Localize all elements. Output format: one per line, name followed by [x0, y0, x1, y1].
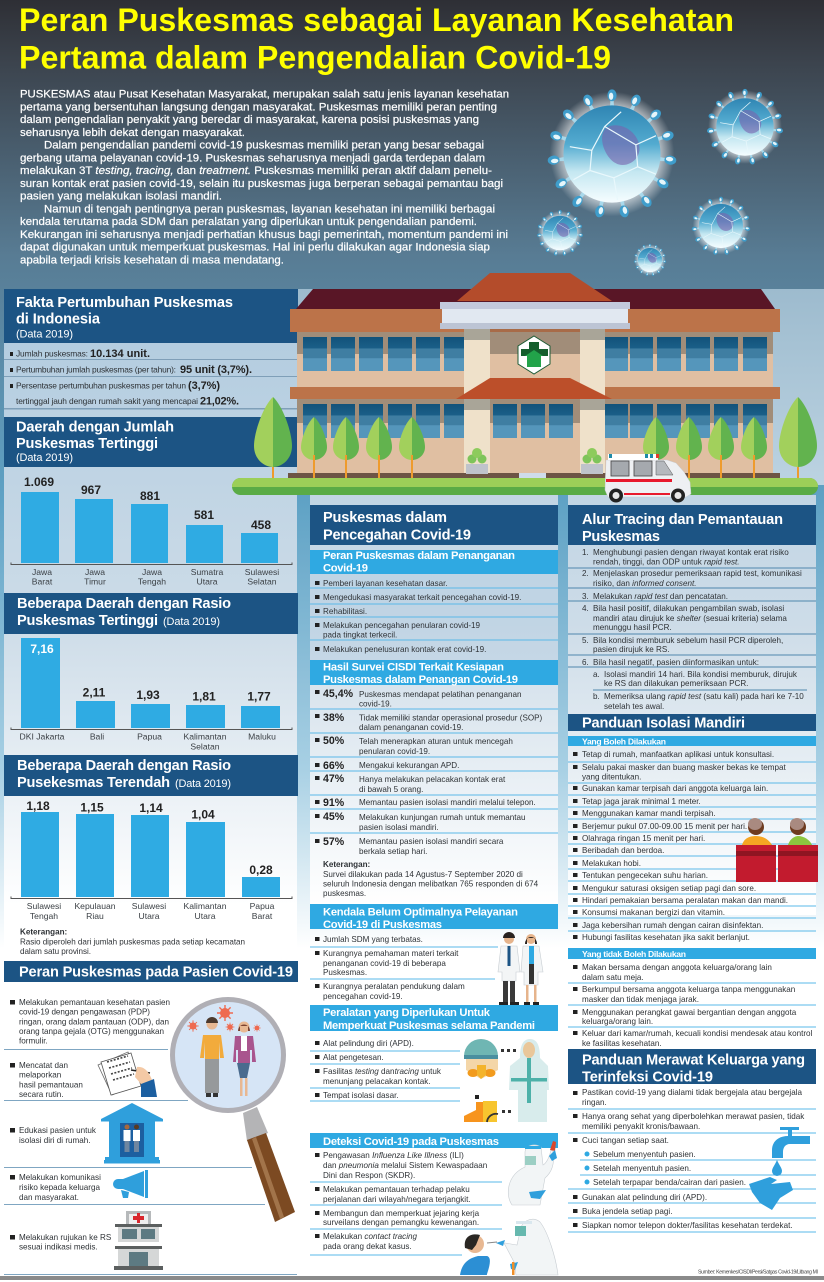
list: deteksi: pada orang dekat kasus.	[323, 1242, 412, 1251]
bar chart: jumlah puskesmas: Tengah	[138, 576, 166, 586]
subheading: yang boleh	[568, 736, 816, 746]
bar chart: jumlah puskesmas: 967	[81, 483, 101, 497]
list: merawat keluarga: Hanya orang sehat yang diperbolehkan merawat pasien, tidak	[582, 1112, 805, 1121]
heading: daerah jumlah tertinggi: Puskesmas Tertinggi	[16, 436, 158, 452]
left column panel	[4, 343, 297, 953]
bar chart: jumlah puskesmas	[11, 475, 292, 586]
list: deteksi	[310, 1151, 502, 1255]
list: alur tracing steps: pasien dirujuk ke RS.	[593, 645, 669, 654]
bar chart: rasio tertinggi: 2,11	[83, 686, 106, 700]
bar chart: jumlah puskesmas: Jawa	[32, 567, 52, 577]
bar chart: rasio tertinggi	[11, 638, 292, 752]
list: peran pada pasien: isolasi diri di rumah.	[19, 1136, 91, 1145]
list: merawat keluarga: Gunakan alat pelindung diri (APD).	[582, 1193, 707, 1202]
list: hasil survei stats: 57%	[323, 836, 345, 848]
sky panel behind building	[298, 289, 824, 485]
list: yang boleh: Melakukan hobi.	[582, 859, 641, 868]
heading: daerah jumlah tertinggi: Daerah dengan Jumlah	[16, 420, 174, 436]
list: alur tracing steps: 5.	[582, 636, 589, 645]
list: kendala: Jumlah SDM yang terbatas.	[323, 935, 423, 944]
list: peran pada pasien: Melakukan rujukan ke RS	[19, 1233, 112, 1242]
list: hasil survei stats: Tidak memiliki standar operasional prosedur (SOP)	[359, 714, 543, 722]
list: merawat keluarga: Pastikan covid-19 yang dialami tidak bergejala atau bergejala	[582, 1088, 803, 1097]
icon: puskesmas logo	[518, 336, 550, 374]
list: alur tracing steps: 3.	[582, 592, 589, 601]
bar chart: rasio tertinggi: Bali	[90, 732, 104, 742]
title: Peran Puskesmas sebagai Layanan Kesehatan	[19, 2, 734, 38]
bar chart: rasio tertinggi: Selatan	[190, 742, 220, 752]
note: keterangan survei: Survei dilakukan pada 14 Agustus-7 September 2020 di	[323, 870, 523, 879]
list: alur tracing steps: 2.	[582, 569, 589, 578]
source credit: Sumber: Kemenkes/CISDI/Persi/Satgas Covid-19/Litbang MI	[698, 1270, 818, 1276]
note: keterangan rasio: Rasio diperoleh dari jumlah puskesmas pada setiap kecamatan	[20, 938, 245, 946]
list: alur tracing steps: ke RS dan dilakukan pemeriksaan PCR.	[604, 679, 748, 688]
subheading: deteksi	[310, 1133, 558, 1148]
icon: health worker with swab	[508, 1141, 557, 1205]
intro text block: dalam pengendalian penyakit yang beredar di masyarakat, karena posisi puskesmas yang	[20, 114, 479, 126]
intro text block: suran kontak erat pasien covid-19, selain itu puskesmas juga berperan sebagai pemantau bagi	[20, 178, 503, 190]
bar chart: rasio terendah: Tengah	[30, 911, 58, 921]
list: peralatan: Tempat isolasi dasar.	[323, 1091, 399, 1100]
list: hasil survei stats: dalam penanganan covid-19.	[359, 723, 463, 732]
fact rows: 95 unit (3,7%).	[180, 364, 252, 376]
list: peran pada pasien: risiko kepada keluarga	[19, 1183, 100, 1192]
list: yang boleh: Tetap jaga jarak minimal 1 meter.	[582, 797, 701, 806]
bar chart: jumlah puskesmas: Utara	[196, 576, 218, 586]
list: peran pada pasien: secara rutin.	[19, 1090, 64, 1099]
icon: house isolation	[101, 1103, 163, 1164]
icon: form and hand	[98, 1052, 157, 1097]
list: yang boleh: Hindari pemakaian bersama peralatan makan dan mandi.	[582, 896, 788, 905]
bar chart: jumlah puskesmas: Barat	[32, 576, 53, 586]
list: merawat keluarga: Buka jendela setiap pagi.	[582, 1207, 672, 1216]
fact rows: Pertumbuhan jumlah puskesmas (per tahun):	[16, 364, 176, 374]
bar chart: rasio tertinggi: 1,77	[247, 690, 271, 704]
bar chart: rasio terendah: 1,04	[191, 808, 215, 822]
list: hasil survei stats: berkala setiap hari.	[359, 847, 427, 856]
list: peralatan: Alat pengetesan.	[323, 1053, 384, 1062]
bar chart: jumlah puskesmas: Sulawesi	[245, 567, 279, 577]
list: peran pada pasien: Melakukan komunikasi	[19, 1173, 101, 1182]
heading: rasio tertinggi	[4, 593, 298, 634]
list: peran pada pasien: melaporkan	[19, 1070, 61, 1080]
bar chart: rasio terendah: Sulawesi	[132, 901, 166, 911]
heading: rasio tertinggi: Beberapa Daerah dengan Rasio	[17, 596, 231, 612]
note: keterangan rasio	[20, 928, 245, 956]
intro text block: apabila terjadi krisis kesehatan di masa mendatang.	[20, 254, 284, 266]
icon: doctors	[498, 932, 543, 1005]
list: peralatan: Fasilitas testing dantracing untuk	[323, 1067, 442, 1076]
list: kendala: pencegahan covid-19.	[323, 992, 403, 1001]
fact rows: (3,7%)	[188, 380, 220, 392]
intro text block	[20, 88, 509, 266]
subheading: hasil survei	[310, 660, 558, 686]
bar chart: rasio terendah: Utara	[194, 911, 216, 921]
heading: rasio terendah: Beberapa Daerah dengan Rasio	[17, 758, 231, 774]
heading: rasio terendah: Pusekesmas Terendah	[17, 775, 170, 791]
list: hasil survei stats: Memantau pasien isolasi mandiri melalui telepon.	[359, 798, 536, 807]
heading: alur tracing	[568, 505, 816, 545]
list: hasil survei stats: covid-19.	[359, 700, 392, 708]
list: peran pada pasien: sesuai indikasi medis.	[19, 1242, 98, 1252]
list: deteksi: dan pneumonia melalui Sistem Kewaspadaan	[323, 1161, 487, 1170]
fact rows: 21,02%.	[200, 396, 239, 408]
list: hasil survei stats: pasien isolasi mandiri.	[359, 823, 439, 832]
list: kendala: Kurangnya peralatan pendukung dalam	[323, 982, 465, 991]
bar chart: rasio terendah: Utara	[138, 911, 160, 921]
subheading: kendala: Kendala Belum Optimalnya Pelayanan	[323, 906, 518, 918]
list: alur tracing steps: 1.	[582, 548, 589, 557]
bar chart: rasio terendah: Riau	[86, 911, 104, 921]
list: kendala	[310, 935, 498, 1001]
list: alur tracing steps: Isolasi mandiri 14 hari. Bila kondisi memburuk, dirujuk	[604, 670, 798, 679]
list: merawat keluarga: Cuci tangan setiap saat.	[582, 1136, 669, 1145]
list: deteksi: Melakukan pemantauan terhadap pelaku	[323, 1185, 470, 1194]
list: hasil survei stats: penularan covid-19.	[359, 747, 430, 756]
list: yang tidak boleh: Makan bersama dengan anggota keluarga/orang lain	[582, 963, 772, 972]
list: alur tracing steps: mandiri atau dirujuk ke shelter (sesuai kriteria) selama	[593, 614, 787, 623]
list: hasil survei stats: 66%	[323, 760, 345, 772]
list: hasil survei stats: Melakukan kunjungan rumah untuk memantau	[359, 813, 525, 822]
list: merawat keluarga: Siapkan nomor telepon dokter/fasilitas kesehatan terdekat.	[582, 1221, 793, 1230]
list: yang tidak boleh: keluarga/orang lain.	[582, 1017, 653, 1026]
list: hasil survei stats: 91%	[323, 797, 345, 809]
list: alur tracing steps: Bila hasil positif, dilakukan pengambilan swab, isolasi	[593, 604, 784, 613]
note: keterangan rasio: Keterangan:	[20, 928, 67, 936]
list: merawat keluarga: memiliki penyakit kronis/bawaan.	[582, 1122, 700, 1131]
bar chart: rasio tertinggi: Kalimantan	[184, 732, 227, 742]
bar chart: rasio tertinggi: DKI Jakarta	[20, 732, 65, 742]
list: hasil survei stats: 45%	[323, 811, 345, 823]
list: peran pada pasien: Edukasi pasien untuk	[19, 1126, 97, 1135]
list: yang tidak boleh: Keluar dari kamar/rumah, kecuali kondisi mendesak atau kontrol	[582, 1029, 813, 1038]
potted plants	[466, 448, 603, 474]
list: alur tracing steps: Menghubungi pasien dengan riwayat kontak erat risiko	[593, 548, 789, 557]
list: peran pada pasien: formulir.	[19, 1036, 48, 1046]
note: keterangan survei: Keterangan:	[323, 860, 370, 869]
list: hasil survei stats: Memantau pasien isolasi mandiri secara	[359, 837, 504, 846]
panel: alur tracing	[568, 505, 816, 711]
heading: rasio terendah	[4, 755, 298, 796]
heading: merawat keluarga	[568, 1049, 816, 1086]
intro text block: kendala terutama pada SDM dan peralatan yang diperlukan untuk pengendalian pandemi.	[20, 216, 477, 228]
bar chart: rasio terendah: 0,28	[249, 863, 273, 877]
icon: magnifying glass with patients	[170, 997, 295, 1222]
fact rows: Persentase pertumbuhan puskesmas per tahun	[16, 380, 186, 390]
list: merawat keluarga: Setelah menyentuh pasien.	[593, 1164, 691, 1173]
heading: rasio tertinggi: (Data 2019)	[163, 616, 220, 628]
heading: rasio terendah: (Data 2019)	[175, 778, 231, 790]
heading: merawat keluarga: Panduan Merawat Keluarga yang	[582, 1052, 805, 1068]
list: alur tracing steps: Memeriksa ulang rapid test (satu kali) pada hari ke 7-10	[604, 692, 804, 701]
list: deteksi: Pengawasan Influenza Like Illness (ILI)	[323, 1151, 464, 1160]
list: yang tidak boleh: ke fasilitas kesehatan.	[582, 1039, 662, 1048]
heading: pencegahan: Puskesmas dalam	[323, 510, 447, 526]
bar chart: rasio tertinggi: 1,93	[136, 688, 160, 702]
list: merawat keluarga	[568, 1088, 816, 1232]
list: alur tracing steps: b.	[593, 692, 600, 701]
bar chart: jumlah puskesmas: Sumatra	[191, 567, 223, 577]
list: alur tracing steps: Menjelaskan prosedur pemeriksaan rapid test, komunikasi	[593, 569, 802, 578]
list: yang boleh: yang ditentukan.	[582, 772, 641, 782]
heading: peran pada pasien: Peran Puskesmas pada Pasien Covid-19	[19, 964, 293, 980]
list: deteksi: Melakukan contact tracing	[323, 1232, 418, 1241]
subheading: yang boleh: Yang Boleh Dilakukan	[582, 736, 666, 746]
heading: daerah jumlah tertinggi	[4, 417, 298, 467]
icon: hospital	[114, 1211, 163, 1270]
intro text block: PUSKESMAS atau Pusat Kesehatan Masyarakat, merupakan salah satu jenis layanan kesehatan	[20, 88, 509, 100]
subheading: peran penanganan: Covid-19	[323, 562, 368, 574]
bar chart: jumlah puskesmas: 458	[251, 518, 271, 532]
list: hasil survei stats: Puskesmas mendapat pelatihan penanganan	[359, 690, 521, 699]
panel: panduan isolasi mandiri	[568, 714, 818, 1048]
icon: coronavirus cluster	[537, 89, 783, 276]
list: kendala: Puskesmas.	[323, 968, 367, 977]
list: peran penanganan: Pemberi layanan kesehatan dasar.	[323, 579, 448, 588]
list: peralatan: menunjang pelacakan kontak.	[323, 1077, 431, 1086]
icon: ambulance	[605, 454, 691, 502]
list: peran penanganan: pada tingkat terkecil.	[323, 630, 397, 640]
list: peran pada pasien: Mencatat dan	[19, 1061, 68, 1070]
subheading: kendala	[310, 904, 558, 931]
bar chart: rasio tertinggi: Papua	[137, 732, 162, 742]
list: yang tidak boleh: dalam satu meja.	[582, 973, 644, 982]
list: alur tracing steps: 6.	[582, 658, 589, 667]
list: alur tracing steps: a.	[593, 670, 600, 679]
list: yang boleh: Hubungi fasilitas kesehatan jika sakit berlanjut.	[582, 933, 750, 942]
intro text block: Kekurangan ini seharusnya menjadi perhatian khusus bagi pemerintah, momentum pandemi ini	[20, 229, 508, 241]
bar chart: rasio terendah: Barat	[252, 911, 273, 921]
list: merawat keluarga: Setelah terpapar benda/cairan dari pasien.	[593, 1178, 746, 1187]
list: peran penanganan: Rehabilitasi.	[323, 607, 367, 616]
bar chart: jumlah puskesmas: Selatan	[247, 576, 277, 586]
subheading: hasil survei: Hasil Survei CISDI Terkait Kesiapan	[323, 662, 504, 674]
list: yang tidak boleh: masker dan tidak menjaga jarak.	[582, 995, 699, 1004]
intro text block: gerbang utama pelayanan covid-19. Puskesmas seharusnya menjadi garda terdepan dalam	[20, 152, 485, 164]
list: yang tidak boleh: Berkumpul bersama anggota keluarga tanpa menggunakan	[582, 985, 795, 994]
list: kendala: penanganan covid-19 di beberapa	[323, 959, 446, 968]
heading: fakta pertumbuhan: (Data 2019)	[16, 328, 73, 340]
fact rows: Jumlah puskesmas:	[16, 348, 88, 358]
list: alur tracing steps: menunggu hasil PCR.	[593, 623, 672, 632]
list: merawat keluarga: ringan.	[582, 1098, 607, 1107]
list: peran penanganan: Melakukan pencegahan penularan covid-19	[323, 621, 481, 630]
list: hasil survei stats: 45,4%	[323, 688, 354, 700]
bar chart: rasio terendah: Kalimantan	[184, 901, 227, 911]
list: hasil survei stats: di bawah 5 orang.	[359, 785, 423, 794]
bar chart: jumlah puskesmas: 881	[140, 489, 160, 503]
list: peran pada pasien: orang tanpa gejala (OTG) menggunakan	[19, 1027, 164, 1036]
list: peralatan	[310, 1039, 460, 1101]
list: hasil survei stats: Mengakui kekurangan APD.	[359, 761, 459, 770]
list: yang tidak boleh	[568, 963, 816, 1048]
subheading: peran penanganan: Peran Puskesmas dalam Penanganan	[323, 550, 515, 562]
list: peran pada pasien: covid-19 dengan pengawasan (PDP)	[19, 1008, 150, 1016]
fact rows	[4, 348, 297, 410]
heading: panduan isolasi	[568, 714, 816, 732]
fact rows: 10.134 unit.	[90, 348, 150, 360]
bar chart: jumlah puskesmas: Jawa	[142, 567, 162, 577]
subheading: peralatan: Memperkuat Puskesmas selama Pandemi	[323, 1020, 535, 1032]
bar chart: jumlah puskesmas: Timur	[84, 576, 106, 586]
bar chart: rasio terendah: Kepulauan	[74, 901, 116, 911]
center column panel	[310, 495, 558, 915]
bar chart: jumlah puskesmas: 581	[194, 508, 214, 522]
subheading: yang tidak boleh: Yang tidak Boleh Dilakukan	[582, 949, 686, 959]
fact rows: tertinggal jauh dengan rumah sakit yang mencapai	[16, 396, 198, 406]
list: peran pada pasien: ringan, orang dalam pantauan (ODP), dan	[19, 1018, 169, 1026]
list: peran pada pasien: Melakukan pemantauan kesehatan pasien	[19, 998, 170, 1007]
subheading: deteksi: Deteksi Covid-19 pada Puskesmas	[323, 1136, 499, 1148]
list: peran pada pasien: dan masyarakat.	[19, 1193, 79, 1202]
list: hasil survei stats: Telah menerapkan aturan untuk mencegah	[359, 737, 513, 746]
heading: pencegahan: Pencegahan Covid-19	[323, 528, 471, 544]
list: alur tracing steps: risiko, dan informed consent.	[593, 579, 696, 588]
bar chart: rasio terendah: Sulawesi	[27, 901, 61, 911]
intro text block: dapat digunakan untuk memperkuat puskesmas. Hal ini perlu dilakukan agar Indonesia siap	[20, 242, 490, 254]
bar chart: jumlah puskesmas: 1.069	[24, 475, 54, 489]
note: keterangan rasio: dalam satu provinsi.	[20, 947, 91, 956]
intro text block: melakukan 3T testing, tracing, dan treatment. Puskesmas memiliki peran aktif dalam penelu-	[20, 165, 492, 177]
list: alur tracing steps: Melakukan rapid test dan pencatatan.	[593, 592, 728, 601]
list: alur tracing steps: Bila hasil negatif, pasien diinformasikan untuk:	[593, 658, 759, 667]
bottom rule	[0, 1276, 824, 1280]
bar chart: rasio terendah	[11, 799, 292, 921]
intro text block: Namun di tengah pentingnya peran puskesmas, layanan kesehatan ini memiliki berbagai	[44, 203, 495, 215]
list: alur tracing steps: setelah tes awal.	[604, 702, 664, 711]
list: peran penanganan	[310, 574, 558, 660]
list: yang boleh: Tentukan pengecekan suhu harian.	[582, 871, 708, 880]
heading: fakta pertumbuhan	[4, 289, 298, 343]
list: hasil survei stats: Hanya melakukan pelacakan kontak erat	[359, 775, 506, 784]
subheading: peran penanganan	[310, 550, 558, 574]
note: keterangan survei: seluruh Indonesia dengan melibatkan 765 responden di 674	[323, 880, 539, 888]
list: peran penanganan: Mengedukasi masyarakat terkait pencegahan covid-19.	[323, 593, 521, 602]
right column panel	[568, 495, 816, 915]
panel: panduan merawat keluarga	[568, 1049, 816, 1232]
trees	[254, 397, 817, 479]
bar chart: rasio terendah: 1,14	[139, 801, 163, 815]
list: yang tidak boleh: Menggunakan perangkat gawai bergantian dengan anggota	[582, 1008, 797, 1017]
title	[19, 2, 734, 76]
list: yang boleh: Beribadah dan berdoa.	[582, 846, 664, 855]
subheading: peralatan: Peralatan yang Diperlukan Untuk	[323, 1007, 491, 1019]
list: peran penanganan: Melakukan penelusuran kontak erat covid-19.	[323, 645, 486, 654]
list: hasil survei stats: 47%	[323, 773, 345, 785]
heading: alur tracing: Puskesmas	[582, 529, 660, 545]
intro text block: pasien yang melakukan isolasi mandiri.	[20, 190, 222, 202]
list: peralatan: Alat pelindung diri (APD).	[323, 1039, 414, 1048]
list: deteksi: Dini dan Respon (SKDR).	[323, 1171, 415, 1180]
subheading: kendala: Covid-19 di Puskesmas	[323, 919, 442, 931]
panel: fakta pertumbuhan	[4, 289, 298, 410]
panel: peran pada pasien	[4, 961, 298, 1275]
heading: fakta pertumbuhan: Fakta Pertumbuhan Puskesmas	[16, 295, 233, 311]
bar chart: jumlah puskesmas: Jawa	[85, 567, 105, 577]
bar chart: rasio terendah: 1,18	[26, 799, 50, 813]
list: merawat keluarga: Sebelum menyentuh pasien.	[593, 1150, 696, 1159]
note: keterangan survei	[323, 860, 539, 898]
list: yang boleh: Olahraga ringan 15 menit per hari.	[582, 834, 705, 843]
icon: people on chairs	[736, 818, 818, 882]
illustration: puskesmas building	[288, 273, 780, 478]
list: deteksi: Membangun dan memperkuat jejaring kerja	[323, 1209, 480, 1218]
intro text block: Dalam pengendalian pandemi covid-19 puskesmas memiliki peran yang besar sebagai	[44, 140, 484, 152]
list: peran pada pasien: hasil pemantauan	[19, 1080, 83, 1090]
list: kendala: Kurangnya pemahaman materi terkait	[323, 949, 459, 958]
list: yang boleh: Berjemur pukul 07.00-09.00 15 menit per hari.	[582, 822, 747, 831]
list: hasil survei stats	[310, 688, 558, 856]
list: peran pada pasien	[4, 998, 297, 1275]
icon: tap and washing hands	[749, 1127, 810, 1210]
list: yang boleh: Konsumsi makanan bergizi dan vitamin.	[582, 908, 725, 917]
heading: alur tracing: Alur Tracing dan Pemantauan	[582, 512, 783, 528]
heading: pencegahan	[310, 505, 558, 545]
panel: puskesmas dalam pencegahan	[310, 505, 558, 1275]
list: yang boleh: Selalu pakai masker dan buang masker bekas ke tempat	[582, 763, 787, 772]
subheading: yang tidak boleh	[568, 948, 816, 959]
list: alur tracing steps	[568, 548, 816, 711]
list: yang boleh: Mengukur saturasi oksigen setiap pagi dan sore.	[582, 884, 756, 893]
bar chart: rasio terendah: Papua	[250, 901, 275, 911]
list: hasil survei stats: 38%	[323, 712, 345, 724]
icon: megaphone	[113, 1170, 148, 1198]
list: yang boleh: Menggunakan kamar mandi terpisah.	[582, 809, 716, 818]
list: yang boleh: Tetap di rumah, manfaatkan aplikasi untuk konsultasi.	[582, 750, 774, 759]
white lower zone	[0, 955, 824, 1282]
list: alur tracing steps: Bila kondisi memburuk sebelum hasil PCR diperoleh,	[593, 636, 783, 645]
icon: protective equipment	[464, 1039, 549, 1122]
subheading: hasil survei: Puskesmas dalam Penangan Covid-19	[323, 674, 518, 686]
heading: merawat keluarga: Terinfeksi Covid-19	[582, 1070, 713, 1086]
bar chart: rasio terendah: 1,15	[80, 800, 104, 814]
list: yang boleh: Jaga kebersihan rumah dengan cairan disinfektan.	[582, 921, 763, 930]
bar chart: rasio tertinggi: 7,16	[30, 642, 54, 656]
title: Pertama dalam Pengendalian Covid-19	[19, 40, 611, 76]
intro text block: seharusnya lebih dekat dengan masyarakat.	[20, 127, 245, 139]
list: alur tracing steps: 4.	[582, 604, 589, 613]
heading: fakta pertumbuhan: di Indonesia	[16, 312, 101, 328]
bar chart: rasio tertinggi: Maluku	[248, 732, 276, 742]
list: hasil survei stats: 50%	[323, 735, 345, 747]
note: keterangan survei: puskesmas.	[323, 889, 366, 898]
bar chart: rasio tertinggi: 1,81	[192, 690, 216, 704]
list: yang boleh: Gunakan kamar terpisah dari anggota keluarga lain.	[582, 784, 768, 793]
subheading: peralatan	[310, 1005, 558, 1032]
list: yang boleh	[568, 750, 816, 942]
icon: swab test on patient	[460, 1219, 558, 1275]
list: deteksi: surveilans dengan pemangku kewenangan.	[323, 1218, 479, 1227]
heading: panduan isolasi: Panduan Isolasi Mandiri	[582, 716, 745, 732]
intro text block: pertama yang bersentuhan langsung dengan masyarakat. Puskesmas memiliki peran penting	[20, 101, 497, 113]
heading: daerah jumlah tertinggi: (Data 2019)	[16, 452, 73, 464]
heading: rasio tertinggi: Puskesmas Tertinggi	[17, 613, 158, 629]
list: alur tracing steps: rendah, tinggi, dan ODP untuk rapid test.	[593, 558, 740, 566]
ground strip	[232, 478, 818, 495]
list: deteksi: perjalanan dari wilayah/negara terjangkit.	[323, 1195, 471, 1204]
